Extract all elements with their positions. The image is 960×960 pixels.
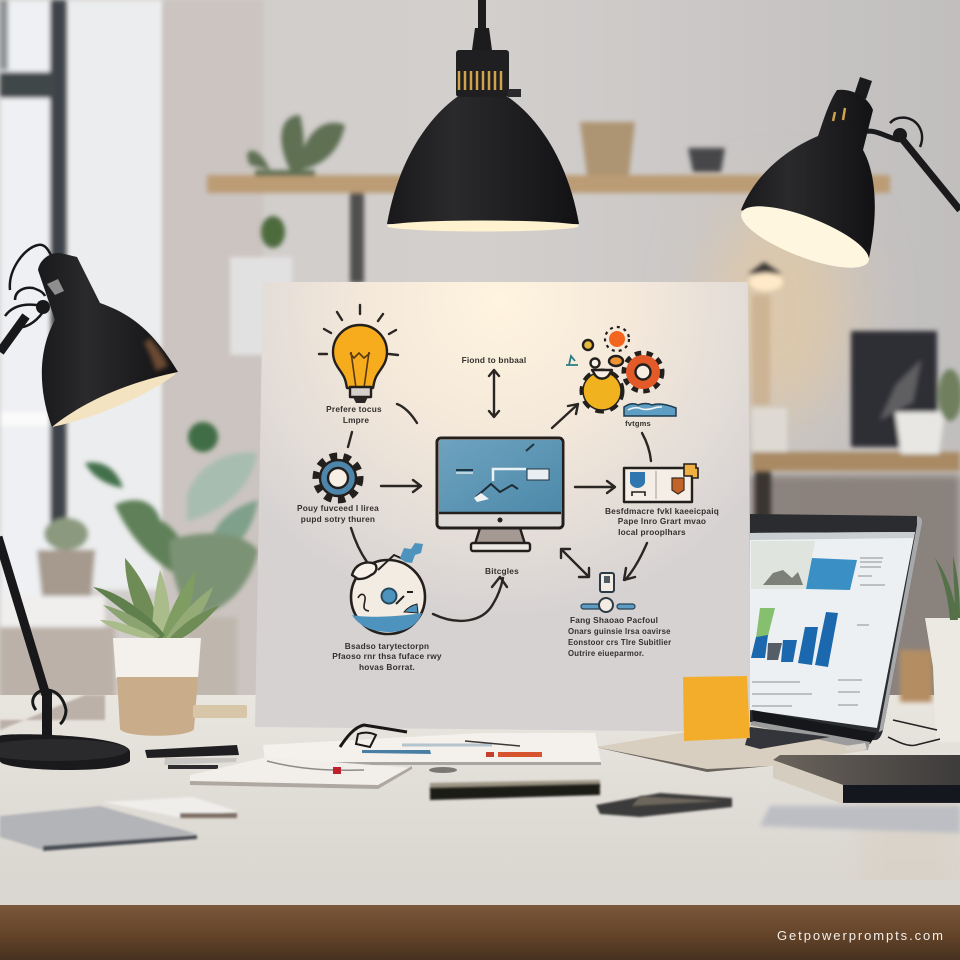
label: gear: Pouy fuvceed I lirea [297,503,379,513]
blurred background plant [85,422,258,702]
arrow: vertical double [489,370,499,417]
label: bulb: Lmpre [343,415,369,425]
right desk lamp [734,77,960,280]
desk [0,695,960,960]
arrow: gear to monitor [381,480,421,492]
label: piston: Onars guinsie lrsa oavirse [568,627,671,636]
label: panel: Iocal prooplhars [618,527,686,537]
label: globe: Pfaoso rnr thsa fuface rwy [332,651,442,661]
label: piston: Outrire eiueparmor. [568,649,644,658]
arrow: gears to panel [642,433,651,461]
window [0,0,115,727]
upper wall shelf with items [207,115,890,355]
arrow: monitor to gears [552,404,578,428]
icon: piston [581,573,635,612]
label: top centre: Fiond to bnbaal [462,355,526,365]
sticky note [683,676,750,741]
label: panel: Besfdmacre fvkl kaeeicpaiq [605,506,719,516]
desk notebooks left [0,797,237,851]
arrow: bulb to gear [348,432,352,447]
potted plant left [93,558,247,736]
label: piston: Eonstoor crs Tlre Subitlier [568,638,671,647]
icon: blue gear [317,457,359,499]
arrow: globe curve to centre [433,577,507,621]
laptop [595,514,922,772]
whiteboard panel [255,282,751,732]
background wall [0,0,960,720]
desk papers and glasses [145,725,601,789]
left desk lamp [0,245,178,770]
label: piston: Fang Shaoao Pacfoul [570,615,658,625]
icon: globe [351,543,425,634]
phones [430,780,732,817]
label: gears: fvtgms [625,419,651,428]
label: panel [605,506,719,537]
arrow: curve from bulb [397,404,417,423]
label: bottom centre: Bitcgles [485,566,519,576]
arrow: gear to globe [351,528,367,562]
label: panel: Pape lnro Grart mvao [618,516,706,526]
label: gear: pupd sotry thuren [301,514,375,524]
label: globe: hovas Borrat. [359,662,415,672]
label: piston [568,615,671,658]
arrow: monitor to panel [575,481,615,493]
centre pendant lamp [387,0,579,232]
right wall picture, lamp and shelf [748,262,960,521]
arrow: panel to piston [624,543,647,580]
label: gear [297,503,379,524]
right plant pot [888,556,960,745]
icon: orange and yellow gears [566,327,676,416]
icon: central monitor [437,438,563,551]
icon: split panel [624,464,698,502]
label: globe [332,641,442,672]
arrow: diagonal double [561,549,589,577]
label: bulb: Prefere tocus [326,404,382,414]
icon: light bulb [319,305,398,403]
label: bulb [326,404,382,425]
label: globe: Bsadso tarytectorpn [345,641,429,651]
notebook right [760,755,960,833]
watermark: Getpowerprompts.com [777,928,943,943]
